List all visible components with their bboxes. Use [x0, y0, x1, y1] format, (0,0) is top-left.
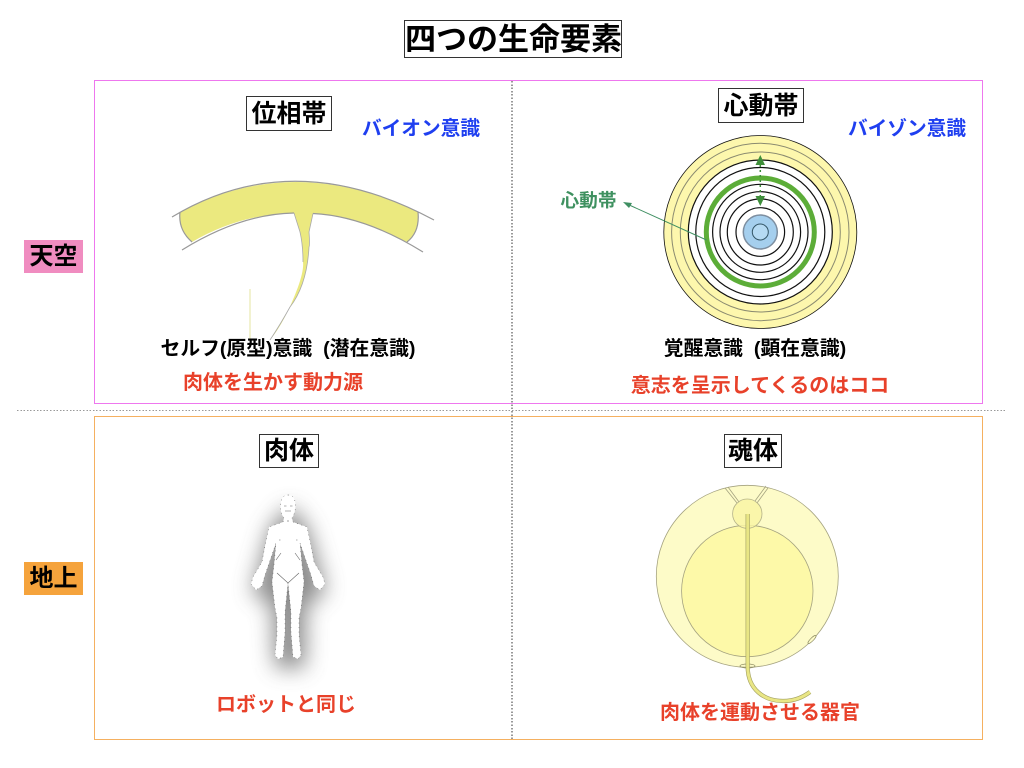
heading: 位相帯: 位相帯 [251, 100, 326, 128]
heading: 肉体 [259, 434, 319, 468]
icon: human body [251, 495, 326, 668]
heading: 心動帯: 心動帯 [723, 92, 798, 120]
panel: heaven frame [94, 80, 983, 404]
label: 地上 [24, 562, 83, 595]
label: 心動帯 green: 心動帯 [560, 190, 617, 211]
text: 覚醒意識: 覚醒意識 (顕在意識) [664, 338, 846, 360]
label: 天空: 天空 [30, 243, 78, 270]
text: 意志を呈示してくるのはココ: 意志を呈示してくるのはココ [631, 375, 889, 397]
text: 肉体を生かす動力源: 肉体を生かす動力源 [183, 372, 363, 394]
text: ロボットと同じ: ロボットと同じ [216, 694, 356, 716]
label: 地上: 地上 [30, 565, 78, 592]
label: 天空 [24, 240, 83, 273]
text: セルフ(原型)意識: セルフ(原型)意識 (潜在意識) [161, 338, 415, 360]
vertical divider [511, 81, 512, 740]
diagram: soul body [656, 485, 838, 701]
title: 四つの生命要素 [405, 22, 622, 57]
text: バイゾン意識: バイゾン意識 [848, 118, 966, 140]
heading: 位相帯 [246, 96, 332, 131]
horizontal divider [17, 410, 1007, 411]
arrow: 心動帯 pointer [623, 202, 706, 240]
arrow: pulsation range [756, 155, 765, 206]
text: 肉体を運動させる器官: 肉体を運動させる器官 [660, 702, 860, 724]
heading: 心動帯 [718, 88, 804, 123]
panel: earth frame [94, 416, 983, 740]
text: バイオン意識: バイオン意識 [362, 118, 480, 140]
heading: 肉体: 肉体 [264, 437, 314, 465]
diagram: concentric rings [664, 136, 857, 328]
heading: 魂体: 魂体 [728, 437, 778, 465]
